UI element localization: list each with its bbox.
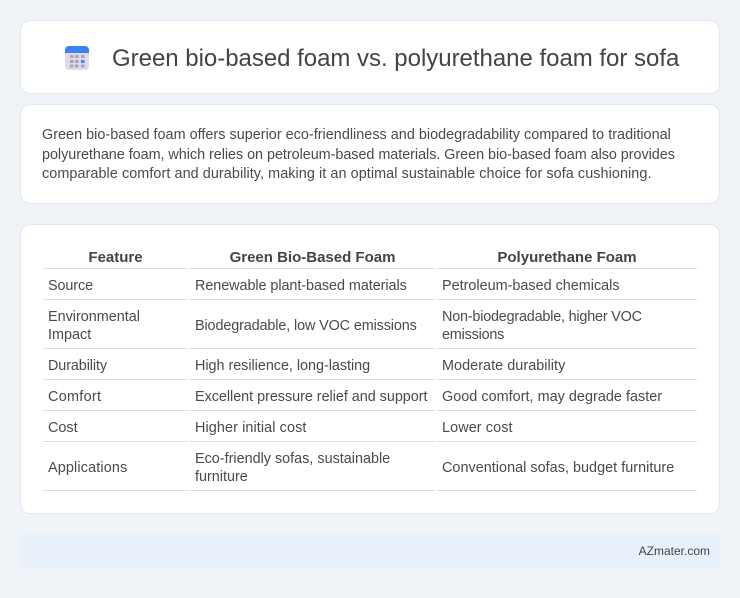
row: applications: Conventional sofas, budget furniture (442, 460, 674, 476)
summary text: polyurethane foam, which relies on petroleum-based materials. Green bio-based foam also provides (42, 146, 675, 162)
summary card (20, 104, 720, 204)
title: Green bio-based foam vs. polyurethane foam for sofa (112, 45, 679, 72)
column headers: Feature (88, 249, 143, 266)
row: durability (48, 358, 566, 374)
row: comfort: Good comfort, may degrade faster (442, 389, 662, 405)
row: cost: Higher initial cost (195, 420, 306, 436)
row: source: Source (48, 278, 93, 294)
row: environmental impact: Biodegradable, low VOC emissions (195, 318, 417, 334)
comparison table (43, 249, 697, 491)
row: source: Renewable plant-based materials (195, 278, 407, 294)
row: source: Petroleum-based chemicals (442, 278, 620, 294)
table card (20, 224, 720, 514)
row: durability: High resilience, long-lasting (195, 358, 370, 374)
row: applications: Applications (48, 460, 127, 476)
summary text (42, 127, 675, 182)
row: comfort (48, 389, 662, 405)
row: applications (48, 451, 674, 485)
footer credit: AZmater.com (639, 544, 710, 558)
icon: calendar (65, 46, 89, 70)
row: environmental impact: Environmental (48, 309, 140, 325)
column headers: Green Bio-Based Foam (230, 249, 395, 266)
row: cost: Cost (48, 420, 78, 436)
row: durability: Moderate durability (442, 358, 565, 374)
row: environmental impact: Non-biodegradable, higher VOC (442, 309, 642, 325)
row: applications: Eco-friendly sofas, sustainable (195, 451, 390, 467)
header card (20, 20, 720, 94)
row: comfort: Excellent pressure relief and support (195, 389, 427, 405)
row: source (48, 278, 620, 294)
row: comfort: Comfort (48, 389, 101, 405)
footer bar (20, 534, 720, 568)
summary text: comparable comfort and durability, making it an optimal sustainable choice for sofa cushioning. (42, 166, 652, 182)
row: durability: Durability (48, 358, 107, 374)
column headers: Polyurethane Foam (497, 249, 637, 266)
row: cost: Lower cost (442, 420, 513, 436)
column headers (88, 249, 637, 266)
row: environmental impact: emissions (442, 327, 504, 343)
row: cost (48, 420, 513, 436)
summary text: Green bio-based foam offers superior eco-friendliness and biodegradability compared to traditional (42, 127, 671, 143)
row: environmental impact (48, 309, 642, 343)
row: environmental impact: Impact (48, 327, 91, 343)
row: applications: furniture (195, 469, 248, 485)
